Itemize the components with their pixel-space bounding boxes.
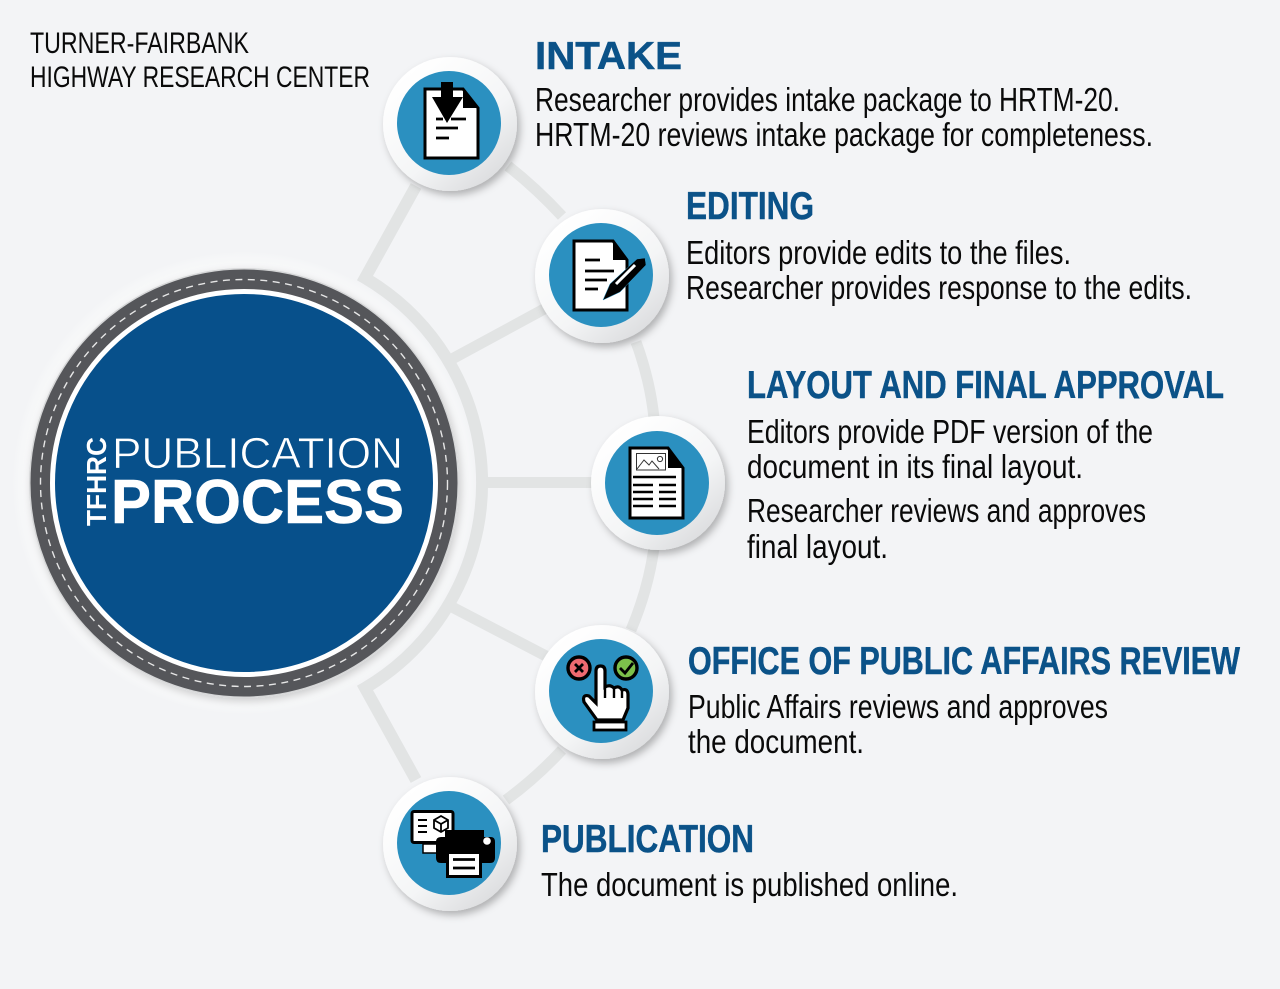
step 3: layout text: final layout. bbox=[747, 528, 888, 565]
connector to editing bbox=[452, 308, 546, 359]
connector to layout bbox=[480, 477, 594, 488]
step 4: public affairs text: Public Affairs reviews and approves bbox=[688, 688, 1108, 725]
icon: document with pen bbox=[574, 240, 646, 310]
halo bbox=[13, 252, 475, 714]
step 3: layout text: document in its final layout. bbox=[747, 448, 1083, 485]
step 1: intake text: Researcher provides intake package to HRTM-20. bbox=[535, 81, 1120, 118]
step 3: layout text bbox=[747, 364, 1224, 565]
outer arc editing to layout bbox=[636, 342, 654, 418]
badge title: PUBLICATION bbox=[112, 429, 403, 478]
step 2: editing icon bbox=[535, 209, 669, 343]
step 4: public affairs icon bbox=[535, 625, 669, 759]
badge title: PROCESS bbox=[111, 468, 404, 537]
connector network bbox=[365, 166, 654, 800]
step 2: editing text: EDITING bbox=[686, 185, 814, 228]
badge title bbox=[81, 429, 404, 537]
step 2: editing text: Editors provide edits to the files. bbox=[686, 234, 1071, 271]
organization name: HIGHWAY RESEARCH CENTER bbox=[30, 61, 370, 94]
white rim bbox=[52, 292, 436, 674]
step 4: public affairs text bbox=[688, 640, 1240, 760]
step 3: layout text: Editors provide PDF version of the bbox=[747, 413, 1153, 450]
step 1: intake text: INTAKE bbox=[535, 35, 682, 78]
icon: hand choosing approve or reject bbox=[568, 657, 637, 730]
step 5: publication text: The document is published online. bbox=[541, 866, 958, 903]
step 4: public affairs text: the document. bbox=[688, 723, 864, 760]
organization name: TURNER-FAIRBANK bbox=[30, 27, 249, 60]
badge title: TFHRC bbox=[81, 437, 112, 526]
outer arc layout to public affairs bbox=[631, 548, 654, 630]
step 1: intake text bbox=[535, 35, 1153, 153]
organization name bbox=[30, 27, 370, 94]
icon: document with download arrow bbox=[425, 82, 479, 158]
central badge bbox=[13, 252, 475, 714]
connector to public affairs bbox=[452, 607, 546, 656]
step 5: publication icon bbox=[383, 777, 517, 911]
icon: monitor and printer bbox=[412, 812, 495, 876]
step 5: publication text bbox=[541, 818, 958, 903]
outer arc intake to editing bbox=[508, 166, 562, 216]
step 1: intake icon bbox=[383, 57, 517, 191]
step 3: layout icon bbox=[591, 416, 725, 550]
road ring bbox=[29, 268, 459, 698]
outer arc public affairs to publication bbox=[506, 750, 562, 800]
step 1: intake text: HRTM-20 reviews intake package for completeness. bbox=[535, 116, 1153, 153]
step 3: layout text: Researcher reviews and approves bbox=[747, 492, 1146, 529]
inner arc with intake and publication branches bbox=[365, 186, 482, 780]
step 2: editing text bbox=[686, 185, 1192, 306]
icon: laid out page bbox=[630, 447, 684, 518]
step 5: publication text: PUBLICATION bbox=[541, 818, 754, 861]
